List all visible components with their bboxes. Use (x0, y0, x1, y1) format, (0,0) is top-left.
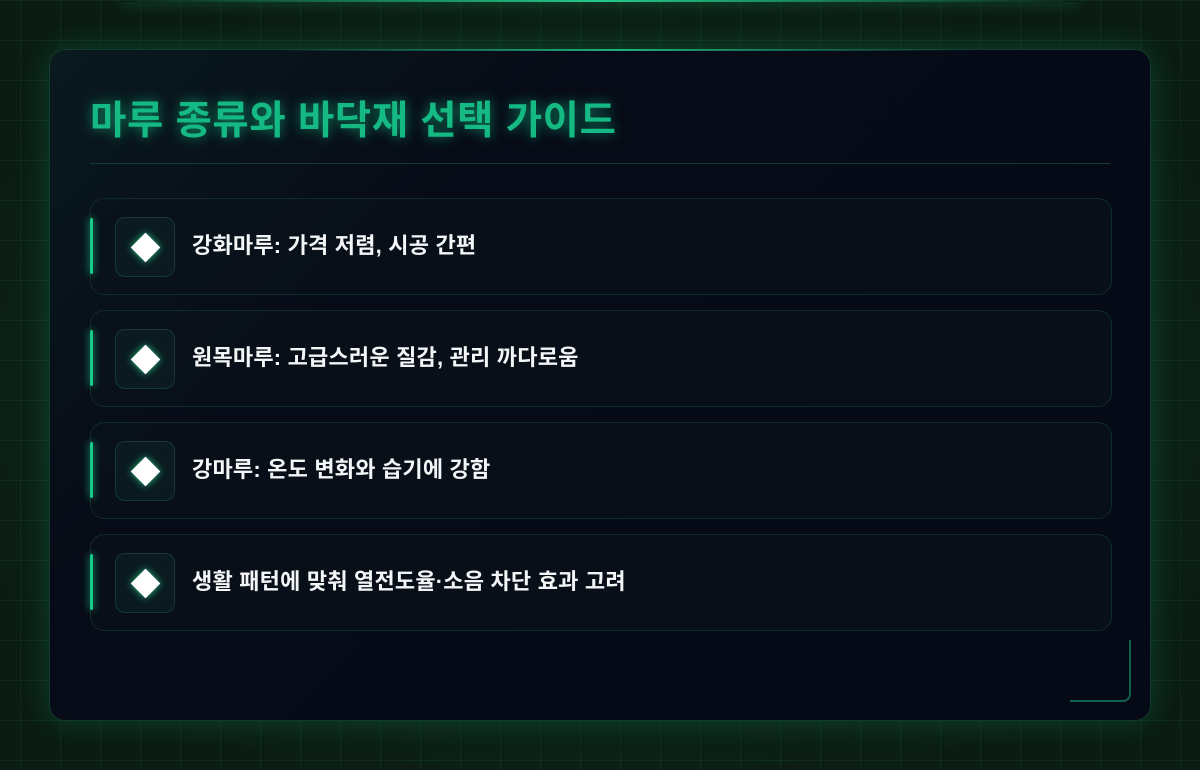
icon: diamond (115, 217, 175, 277)
text: 강마루: 강마루: 온도 변화와 습기에 강함 (192, 457, 490, 482)
item: 생활 패턴 (90, 534, 1112, 631)
text: 원목마루: 원목마루: 고급스러운 질감, 관리 까다로움 (192, 345, 579, 370)
corner bracket decoration (1070, 640, 1131, 702)
text: 생활 패턴: 생활 패턴에 맞춰 열전도율·소음 차단 효과 고려 (192, 569, 626, 594)
icon: diamond (115, 553, 175, 613)
title: 마루 종류와 바닥재 선택 가이드 (90, 99, 617, 143)
icon: diamond (115, 329, 175, 389)
item: 강화마루 (90, 198, 1112, 295)
item: 강마루 (90, 422, 1112, 519)
text: 강화마루: 강화마루: 가격 저렴, 시공 간편 (192, 233, 476, 258)
icon: diamond (115, 441, 175, 501)
item: 원목마루 (90, 310, 1112, 407)
